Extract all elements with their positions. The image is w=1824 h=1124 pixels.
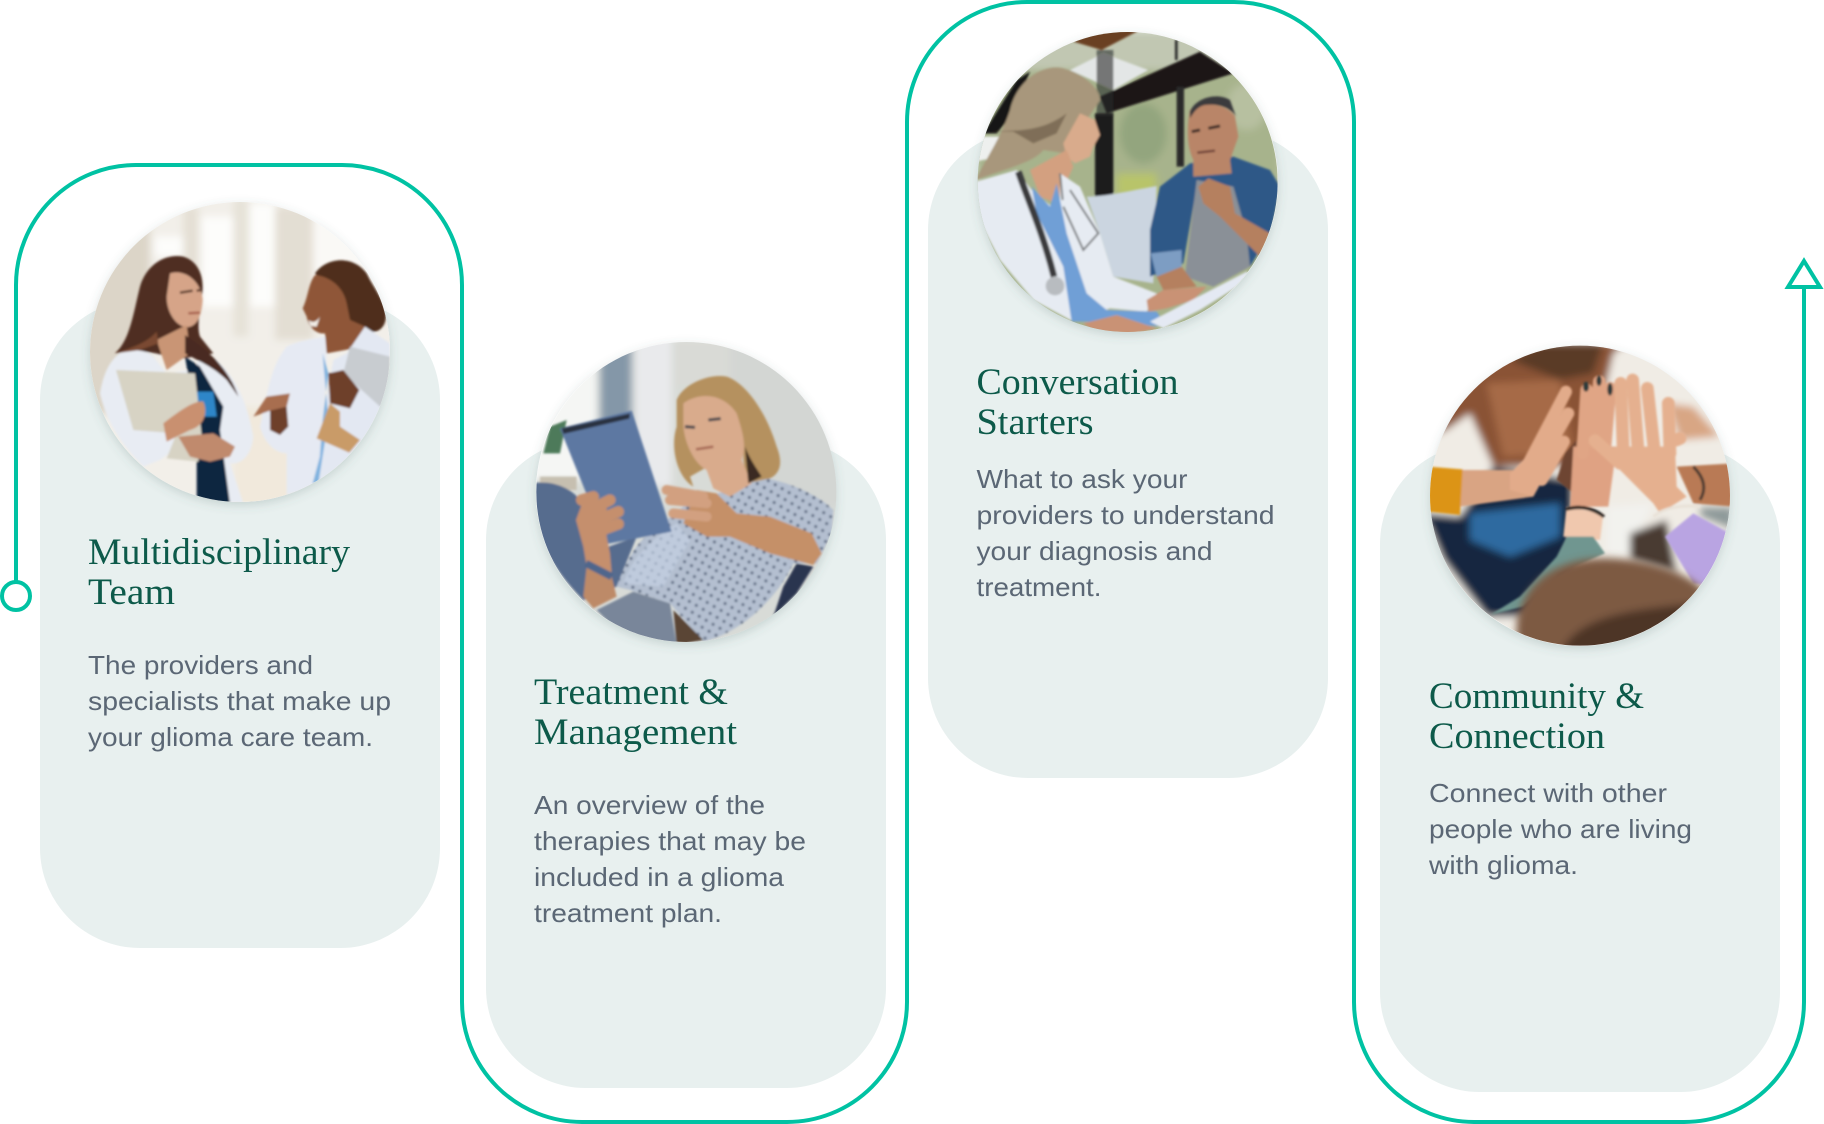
body text: The providers and <box>88 650 313 680</box>
arrowhead <box>1788 261 1820 287</box>
heading: Community & <box>1429 676 1644 717</box>
body text: included in a glioma <box>534 862 785 892</box>
body text: your glioma care team. <box>88 722 373 752</box>
body text: specialists that make up <box>88 686 391 716</box>
photo: two clinicians talking <box>80 197 397 510</box>
heading: Conversation <box>976 362 1178 403</box>
panel: Conversation Starters <box>928 30 1328 778</box>
photo: doctor talking with a patient <box>975 30 1282 337</box>
panel background <box>1380 444 1780 1092</box>
photo: hands joined in a high five <box>1423 343 1733 653</box>
panel: Community & Connection <box>1380 343 1780 1092</box>
body text: providers to understand <box>976 500 1274 530</box>
body text: treatment. <box>976 572 1102 602</box>
body text: treatment plan. <box>534 898 722 928</box>
body text: An overview of the <box>534 790 765 820</box>
panel background <box>486 440 886 1088</box>
body text: Connect with other <box>1429 778 1667 808</box>
body text: your diagnosis and <box>976 536 1212 566</box>
panel background <box>40 300 440 948</box>
heading: Management <box>534 712 738 753</box>
panel: Multidisciplinary Team <box>40 197 440 948</box>
heading: Starters <box>976 402 1094 443</box>
heading: Connection <box>1429 716 1605 757</box>
photo: woman reading a tablet <box>530 337 843 650</box>
body text: What to ask your <box>976 464 1188 494</box>
heading: Treatment & <box>534 672 728 713</box>
panel: Treatment & Management <box>486 337 886 1088</box>
body text: people who are living <box>1429 814 1692 844</box>
heading: Multidisciplinary <box>88 532 350 573</box>
start marker circle <box>2 582 30 610</box>
body text: therapies that may be <box>534 826 806 856</box>
panel background <box>928 130 1328 778</box>
body text: with glioma. <box>1428 850 1578 880</box>
heading: Team <box>88 572 175 613</box>
